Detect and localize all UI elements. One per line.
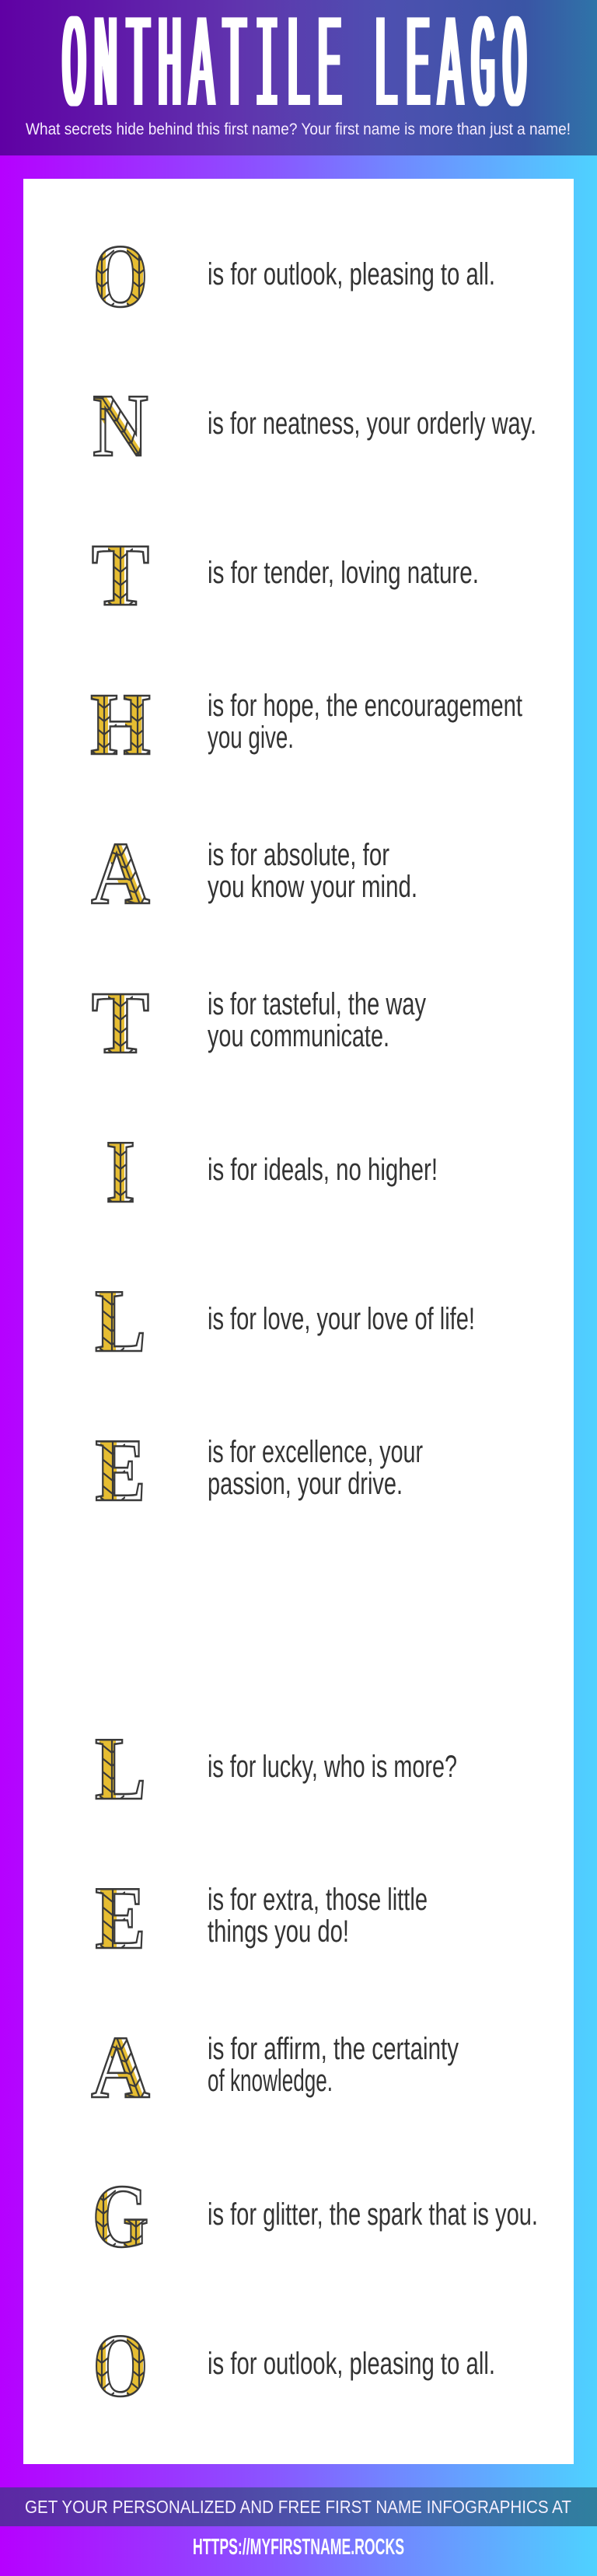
icon: wheat letter O — [96, 246, 145, 308]
icon: wheat letter N — [93, 396, 148, 457]
text: tender: is for tender, loving nature. — [208, 556, 479, 590]
text: absolute — [208, 838, 417, 904]
row: O outlook — [96, 246, 493, 308]
icon: wheat letter A — [91, 2037, 151, 2099]
text: ideals: is for ideals, no higher! — [208, 1153, 438, 1187]
text: hope — [208, 689, 522, 755]
row: N neatness — [93, 396, 535, 457]
icon: wheat letter O: O — [93, 2317, 148, 2416]
text: excellence — [208, 1435, 423, 1501]
icon: wheat letter L — [95, 1291, 144, 1353]
icon: wheat letter A: A — [91, 2017, 150, 2117]
footer band — [0, 2487, 597, 2526]
text: excellence: passion, your drive. — [208, 1467, 403, 1501]
text: affirm — [208, 2032, 459, 2098]
text: tasteful — [208, 987, 426, 1053]
text: lucky: is for lucky, who is more? — [208, 1750, 457, 1784]
icon: wheat letter T: T — [92, 972, 149, 1072]
row: E excellence — [95, 1440, 423, 1502]
row: L lucky — [95, 1739, 456, 1800]
icon: wheat letter E: E — [95, 1869, 146, 1968]
icon: wheat letter E — [95, 1888, 143, 1949]
row: L love — [95, 1291, 473, 1353]
icon: wheat letter L: L — [95, 1719, 146, 1819]
text: absolute: is for absolute, for — [208, 838, 389, 872]
row: T tender — [92, 546, 477, 606]
footer url: HTTPS://MYFIRSTNAME.ROCKS — [193, 2535, 404, 2560]
icon: wheat letter T — [92, 546, 149, 606]
icon: wheat letter G — [95, 2186, 148, 2248]
icon: wheat letter E: E — [95, 1422, 146, 1520]
row: O outlook again — [96, 2335, 493, 2397]
icon: wheat letter A — [91, 843, 151, 905]
text: excellence: is for excellence, your — [208, 1435, 423, 1469]
text: tasteful: you communicate. — [208, 1019, 389, 1053]
row: A affirm — [91, 2037, 459, 2099]
text: extra: is for extra, those little — [208, 1883, 428, 1917]
icon: wheat letter E — [95, 1440, 143, 1502]
text: affirm: of knowledge. — [208, 2064, 333, 2098]
icon: wheat letter T: T — [92, 525, 149, 624]
row: E extra — [95, 1887, 427, 1949]
row: A absolute — [91, 843, 415, 905]
icon: wheat letter L: L — [95, 1272, 146, 1371]
text: affirm: is for affirm, the certainty — [208, 2032, 459, 2066]
icon: wheat letter L — [95, 1739, 144, 1800]
row: G glitter — [95, 2186, 536, 2248]
icon: wheat letter A: A — [91, 823, 150, 923]
icon: wheat letter H: H — [90, 675, 151, 774]
icon: wheat letter H — [90, 695, 151, 756]
row: T tasteful — [92, 992, 426, 1054]
text: hope: you give. — [208, 721, 294, 755]
text: love: is for love, your love of life! — [208, 1302, 475, 1336]
icon: wheat letter N: N — [93, 376, 148, 476]
header band — [0, 0, 597, 155]
text: tasteful: is for tasteful, the way — [208, 987, 426, 1021]
icon: wheat letter O — [96, 2335, 145, 2397]
icon: wheat letter G: G — [93, 2167, 148, 2266]
row: H hope — [90, 693, 522, 756]
icon: wheat letter I — [107, 1142, 134, 1203]
icon: wheat letter T — [92, 993, 149, 1054]
row: I ideals — [107, 1142, 435, 1203]
text: absolute: you know your mind. — [208, 870, 417, 904]
text: extra: things you do! — [208, 1915, 349, 1949]
text: extra — [208, 1883, 428, 1949]
text: outlook: is for outlook, pleasing to all. — [208, 2347, 495, 2381]
icon: wheat letter I: I — [106, 1123, 135, 1222]
icon: wheat letter O: O — [93, 228, 148, 326]
text: outlook: is for outlook, pleasing to all. — [208, 257, 495, 291]
